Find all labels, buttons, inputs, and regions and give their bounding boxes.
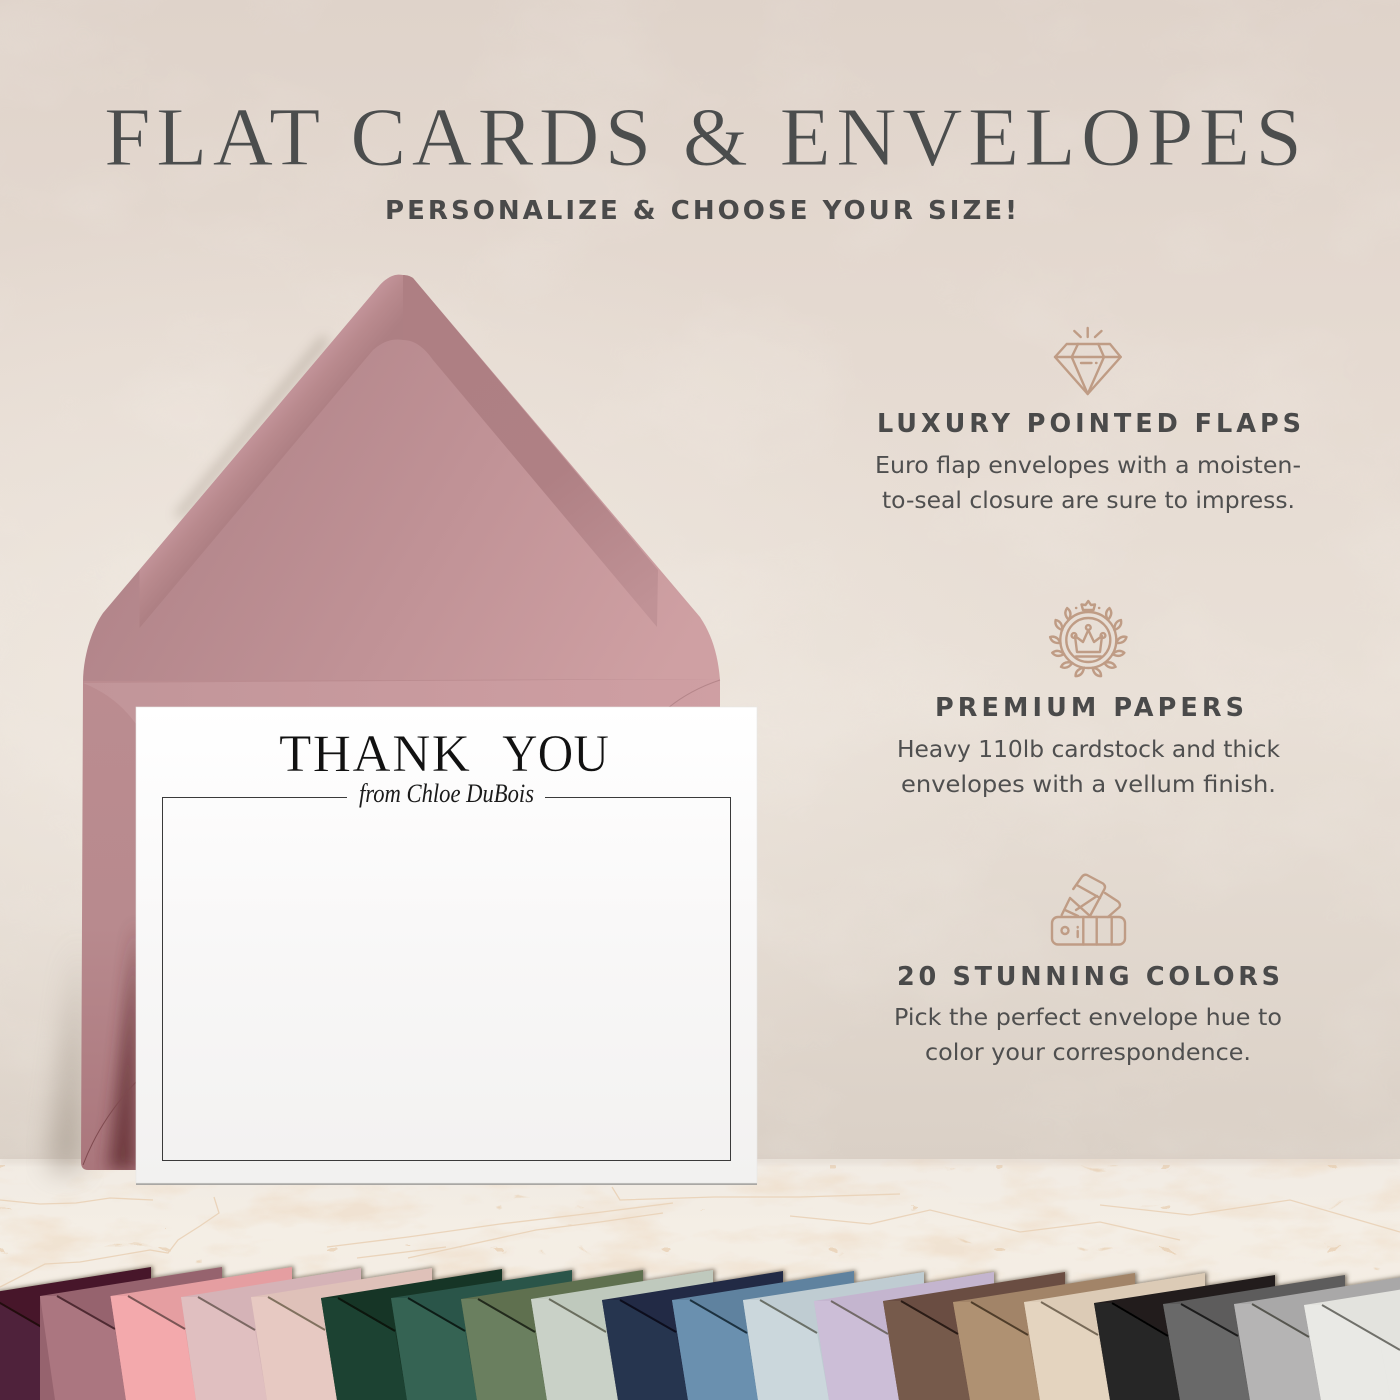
envelope color swatches row [0, 1267, 1400, 1400]
feature description [897, 737, 1281, 798]
icon: crown badge [1049, 601, 1128, 678]
pink envelope [50, 275, 720, 1170]
swatch: gray [1163, 1275, 1355, 1400]
swatch: peach [251, 1268, 442, 1400]
card heading: YOU [502, 725, 609, 783]
feature description: Pick the perfect envelope hue to [894, 1005, 1282, 1031]
envelope top band [83, 679, 720, 724]
feature: twenty stunning colors [894, 962, 1282, 1066]
swatch: white [1304, 1276, 1400, 1400]
feature description: to-seal closure are sure to impress. [882, 488, 1295, 514]
feature heading: PREMIUM PAPERS [935, 693, 1244, 723]
subtitle: PERSONALIZE & CHOOSE YOUR SIZE! [385, 196, 1017, 226]
swatch: forest green [321, 1269, 512, 1400]
card shadow on envelope [108, 920, 136, 1170]
swatch: lilac [814, 1272, 1004, 1400]
feature: luxury pointed flaps [875, 409, 1301, 514]
thank you card [136, 707, 757, 1185]
swatch: cream [1024, 1273, 1215, 1400]
icon: color swatch fan [1052, 875, 1125, 944]
wall shadow beside flap [178, 338, 326, 517]
swatch: mauve [40, 1267, 231, 1400]
flap right band [403, 275, 658, 627]
flap left band [140, 275, 403, 628]
feature description [894, 1005, 1282, 1066]
feature heading: LUXURY POINTED FLAPS [877, 409, 1301, 439]
swatch: tan [953, 1273, 1145, 1400]
envelope body [81, 679, 720, 1170]
swatch: black [1094, 1275, 1285, 1400]
feature description: color your correspondence. [925, 1040, 1251, 1066]
feature description [875, 453, 1301, 514]
swatch: teal [391, 1270, 582, 1400]
swatch: ice [743, 1272, 933, 1400]
card border frame [162, 798, 730, 1160]
frame gap [347, 790, 545, 804]
card heading: THANK [279, 725, 470, 783]
swatch: silver [1234, 1275, 1400, 1400]
feature description: Euro flap envelopes with a moisten- [875, 453, 1301, 479]
swatch: navy [602, 1271, 793, 1400]
swatch: plum [0, 1267, 160, 1400]
feature heading: 20 STUNNING COLORS [897, 962, 1280, 992]
card drop edge [136, 1180, 757, 1185]
feature: premium papers [897, 693, 1281, 798]
right envelope fold [668, 680, 720, 708]
background: marble shelf [0, 1156, 1400, 1400]
card face [136, 707, 757, 1183]
swatch: olive [461, 1270, 652, 1400]
title: FLAT CARDS & ENVELOPES [104, 91, 1302, 184]
swatch: pink [110, 1267, 301, 1400]
swatch: brown [883, 1272, 1075, 1400]
wall shadow beside envelope [50, 940, 80, 1170]
card sender: from Chloe DuBois [359, 779, 534, 808]
feature description: envelopes with a vellum finish. [901, 772, 1276, 798]
swatch: sage [531, 1270, 722, 1400]
feature description: Heavy 110lb cardstock and thick [897, 737, 1281, 763]
card heading [279, 725, 609, 783]
swatch: blush [181, 1268, 371, 1400]
swatch: slate blue [672, 1271, 863, 1400]
icon: diamond [1055, 328, 1121, 394]
envelope flap [83, 275, 720, 682]
lower envelope fold [83, 1082, 136, 1165]
